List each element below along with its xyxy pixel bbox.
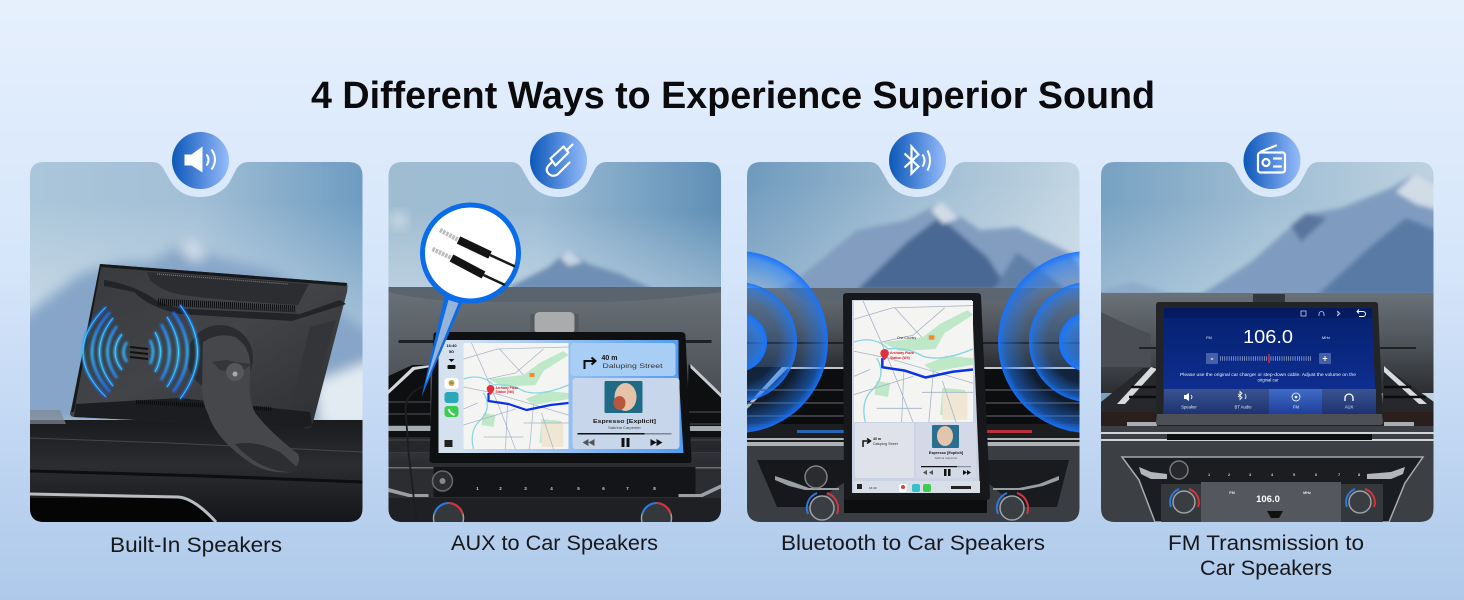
notice text: Please use the original car charger or step-down cable. Adjust the volume on the (1180, 372, 1357, 377)
console: 3 (524, 486, 527, 491)
panel: AUX photo (388, 162, 722, 533)
frequency readout: MHz (1322, 335, 1330, 340)
sound circles right (998, 252, 1080, 432)
source tabs: Speaker (1181, 404, 1197, 410)
music card: Espresso [Explicit] (929, 451, 964, 455)
console (747, 446, 1080, 522)
mountain backdrop (30, 238, 362, 420)
icon: radio (1244, 132, 1300, 189)
callout: aux cable zoom (422, 205, 518, 397)
dashboard (30, 410, 363, 522)
display rear housing (70, 264, 348, 428)
console: 5 (1293, 473, 1295, 477)
console: 2 (499, 486, 502, 491)
phone mount base (530, 312, 578, 334)
climate panel: FM (1229, 491, 1235, 495)
sound waves (83, 305, 198, 399)
source tabs (1164, 389, 1376, 414)
music card (572, 378, 680, 449)
console: 2 (1228, 473, 1230, 477)
bottom dock: 16:40 (869, 486, 877, 490)
map: One Country (897, 336, 917, 340)
navigation card: Daluping Street (873, 442, 898, 446)
mountain backdrop (508, 250, 652, 287)
tuner: + (1322, 354, 1328, 364)
music card: Espresso [Explicit] (593, 419, 656, 425)
console: 4 (1271, 473, 1274, 477)
console: 6 (602, 486, 605, 491)
map: Archway Plaza (890, 351, 914, 355)
mountain backdrop (1101, 174, 1446, 296)
console (388, 467, 721, 522)
source tabs: BT Audio (1235, 404, 1252, 410)
navigation card (570, 343, 676, 376)
tuner: - (1210, 354, 1214, 364)
tablet display with FM screen (1156, 294, 1383, 425)
label: fm transmission to car speakers: FM Transmission to (1168, 532, 1364, 555)
tuner (1206, 353, 1331, 364)
label: built-in speakers: Built-In Speakers (110, 534, 282, 557)
dashboard (388, 287, 722, 467)
map (854, 301, 973, 422)
console (1101, 426, 1434, 522)
air vents (388, 364, 722, 453)
frequency readout: 106.0 (1243, 327, 1293, 347)
mountain backdrop (781, 202, 1080, 288)
source tabs: AUX (1345, 404, 1354, 410)
map: Station (Wil) (496, 390, 514, 394)
climate panel (1170, 489, 1375, 518)
label: fm transmission to car speakers (1168, 532, 1364, 580)
console: 1 (476, 486, 479, 491)
label: fm transmission to car speakers: Car Speakers (1200, 557, 1332, 580)
tablet display (430, 332, 692, 463)
notice text (1180, 372, 1357, 382)
sound circles left (747, 252, 828, 432)
frequency readout (1206, 330, 1330, 343)
frequency readout: FM (1206, 335, 1212, 340)
navigation card: 40 m (873, 437, 881, 441)
map: Station (Wil) (890, 356, 910, 360)
air vents (1101, 366, 1434, 426)
console: 1 (1208, 473, 1210, 477)
console: 3 (1249, 473, 1251, 477)
console: 8 (653, 486, 656, 491)
panel: bluetooth photo (747, 162, 1080, 522)
bottom dock (854, 481, 980, 493)
navigation card: Daluping Street (602, 363, 663, 370)
dashboard (1101, 293, 1434, 393)
stand mount (187, 325, 299, 472)
console: 7 (626, 486, 629, 491)
navigation card (855, 423, 914, 478)
label: aux to car speakers: AUX to Car Speakers (451, 532, 658, 555)
source tabs: FM (1293, 404, 1300, 410)
status and dock icons: 16:40 (446, 343, 457, 348)
notice text: original car (1257, 378, 1279, 382)
title: 4 Different Ways to Experience Superior Sound (311, 75, 1155, 117)
console: 7 (1338, 473, 1340, 477)
dashboard (747, 288, 1080, 368)
music card: Sabrina Carpenter (608, 425, 642, 430)
console: 4 (550, 486, 553, 491)
icon: speaker (172, 132, 229, 189)
icon: aux cable (530, 132, 587, 189)
console: 6 (1315, 473, 1317, 477)
aux cable on vent (404, 386, 424, 498)
music card: Sabrina Carpenter (935, 456, 957, 460)
climate panel: 106.0 (1256, 494, 1280, 505)
console: 8 (1358, 473, 1360, 477)
map (464, 343, 568, 449)
music card (921, 425, 971, 476)
panel: built-in speakers photo (30, 162, 362, 522)
console: 5 (577, 486, 580, 491)
status and dock icons: 5G (449, 349, 454, 354)
top bar icons (1301, 310, 1366, 316)
navigation card: 40 m (602, 355, 617, 362)
air vents (747, 367, 1080, 446)
climate panel: MHz (1303, 491, 1311, 495)
icon: bluetooth (889, 132, 946, 189)
tablet display portrait (843, 293, 990, 513)
label: bluetooth to car speakers: Bluetooth to Car Speakers (781, 532, 1045, 555)
panel: FM transmission photo (1101, 162, 1446, 522)
status and dock icons (444, 343, 458, 447)
map: Archway Plaza (496, 386, 518, 390)
